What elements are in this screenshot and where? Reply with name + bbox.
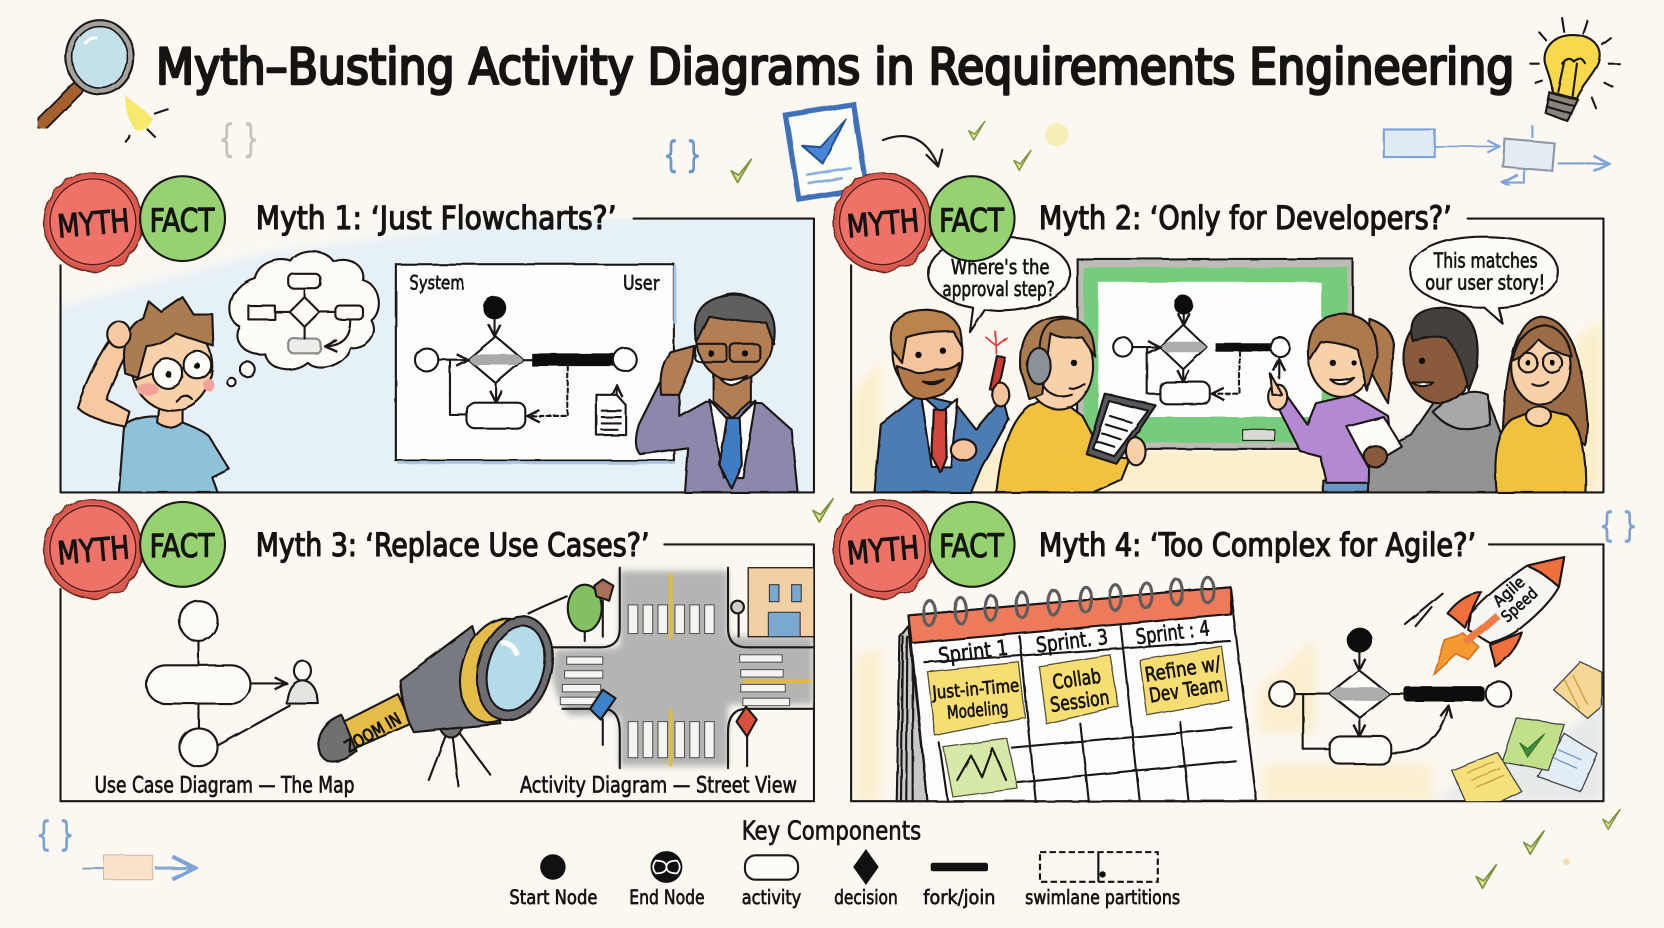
badge pair: panel 3 xyxy=(44,499,225,598)
myth seal 2 xyxy=(833,172,932,271)
heading: myth 3: Myth 3: ‘Replace Use Cases?’ xyxy=(256,526,649,564)
legend: swimlane partitions: swimlane partitions xyxy=(1025,886,1180,909)
icon: blue braces right: { } xyxy=(1599,506,1637,546)
icon: clipboard with check xyxy=(785,104,867,199)
sticky text: collab session: Collab xyxy=(1051,664,1102,694)
myth seal 2: MYTH xyxy=(845,201,921,246)
panel: myth 1 xyxy=(53,212,828,499)
legend: activity: activity xyxy=(742,886,801,909)
sticky text: collab session: Session xyxy=(1049,685,1111,717)
street intersection xyxy=(529,568,814,768)
flow sketch: bottom left xyxy=(82,855,195,880)
sprint calendar xyxy=(897,577,1256,801)
legend: fork join: fork/join xyxy=(923,886,995,909)
use case diagram xyxy=(146,601,318,766)
icon: check between panels xyxy=(813,499,833,522)
badge pair: panel 4 xyxy=(833,499,1015,598)
sticky text: just-in-time modeling: Modeling xyxy=(946,698,1009,724)
panel 1 frame xyxy=(61,219,814,492)
legend: fork join xyxy=(923,863,995,909)
figure: woman with glasses xyxy=(1495,316,1588,492)
icon: scattered checks and yellow dot xyxy=(969,121,1069,170)
legend: end node: End Node xyxy=(629,886,705,909)
title: Myth–Busting Activity Diagrams in Requirements Engineering xyxy=(156,38,1514,96)
legend: swimlane partitions xyxy=(1025,852,1180,909)
label: agile speed: Speed xyxy=(1497,584,1541,626)
fact seal 1 xyxy=(140,176,225,261)
panel 3 frame xyxy=(61,544,814,801)
badge pair: panel 1 xyxy=(44,172,225,271)
icon: blue braces: { } xyxy=(663,135,701,177)
icon: magnifying glass xyxy=(42,20,134,123)
sticky text: refine with dev team: Refine w/ xyxy=(1143,651,1223,687)
green whiteboard xyxy=(1077,259,1353,449)
fact seal 1: FACT xyxy=(150,201,215,239)
legend: key components xyxy=(509,816,1180,909)
telescope with zoom in label xyxy=(318,608,564,786)
figure: person with headset and tablet xyxy=(996,316,1156,492)
panel: myth 3 xyxy=(61,544,814,801)
label: system lane: System xyxy=(410,272,465,295)
panel: myth 2 xyxy=(851,219,1603,492)
label: agile speed: Agile xyxy=(1489,572,1529,611)
rocket with agile speed label xyxy=(1405,557,1564,674)
panel 2 frame xyxy=(851,219,1603,492)
figure: confused boy xyxy=(78,297,229,492)
label: sprint 4: Sprint : 4 xyxy=(1134,616,1211,650)
legend: decision: decision xyxy=(834,886,898,909)
speech bubble: approval step xyxy=(929,237,1070,332)
myth seal 4 xyxy=(833,499,932,598)
legend: activity xyxy=(742,855,801,909)
badge pair: panel 2 xyxy=(833,172,1015,271)
speech bubble: user story xyxy=(1410,237,1558,324)
heading: myth 2: Myth 2: ‘Only for Developers?’ xyxy=(1039,199,1452,237)
figure: person in grey hoodie with notepad xyxy=(1347,308,1506,492)
panel 4 wash xyxy=(854,637,1603,801)
speech text: approval step: approval step? xyxy=(942,277,1055,301)
sticky text: just-in-time modeling: Just-in-Time xyxy=(931,675,1020,704)
speech text: user story: This matches xyxy=(1433,248,1538,272)
myth seal 1: MYTH xyxy=(56,201,131,246)
icon: small yellow spark xyxy=(125,96,168,141)
myth seal 4: MYTH xyxy=(845,528,921,572)
myth seal 3: MYTH xyxy=(56,528,131,572)
whiteboard activity diagram xyxy=(396,264,675,463)
panel 2 warm wash xyxy=(852,318,1602,492)
legend heading: Key Components xyxy=(742,816,921,846)
myth seal 3 xyxy=(44,499,142,598)
fact seal 3: FACT xyxy=(150,527,215,565)
icon: grey braces: { } xyxy=(219,118,259,162)
legend: decision xyxy=(834,849,898,909)
speech text: approval step: Where's the xyxy=(951,255,1050,279)
sticky text: refine with dev team: Dev Team xyxy=(1147,672,1225,708)
heading: myth 4: Myth 4: ‘Too Complex for Agile?’ xyxy=(1039,526,1476,564)
flow sketch: top right xyxy=(1384,125,1609,183)
label: use case diagram: Use Case Diagram — The Map xyxy=(94,773,354,799)
fact seal 2 xyxy=(930,176,1015,261)
fact seal 2: FACT xyxy=(939,201,1004,239)
fact seal 4: FACT xyxy=(939,527,1004,565)
thought cloud xyxy=(227,251,379,386)
figure: bearded man with laser pointer xyxy=(874,310,1009,492)
myth seal 1 xyxy=(44,172,142,271)
legend: start node xyxy=(509,854,597,909)
icon: blue braces bottom left: { } xyxy=(36,815,74,855)
speech text: user story: our user story! xyxy=(1425,271,1545,295)
label: activity diagram: Activity Diagram — Street View xyxy=(520,773,797,799)
figure: man adjusting glasses xyxy=(636,294,798,492)
fact seal 4 xyxy=(930,502,1015,587)
arrow: curved black arrow xyxy=(883,136,942,167)
legend: start node: Start Node xyxy=(509,886,597,909)
label: zoom in: ZOOM IN xyxy=(342,709,405,757)
icon: bottom right checks xyxy=(1476,809,1620,888)
activity diagram xyxy=(1269,627,1511,764)
icon: check mark xyxy=(731,159,751,183)
label: sprint 1: Sprint 1 xyxy=(937,636,1010,669)
icon: lightbulb xyxy=(1530,18,1619,121)
legend: end node xyxy=(629,851,705,909)
label: sprint 3: Sprint. 3 xyxy=(1035,625,1109,659)
panel: myth 4 xyxy=(851,544,1603,802)
figure: woman with ponytail pointing xyxy=(1268,314,1394,492)
label: user lane: User xyxy=(623,272,660,295)
panel 1 pale blue wash xyxy=(53,212,828,499)
scattered sticky notes xyxy=(1452,662,1601,802)
panel 4 frame xyxy=(851,544,1603,801)
fact seal 3 xyxy=(140,502,225,587)
heading: myth 1: Myth 1: ‘Just Flowcharts?’ xyxy=(256,199,617,237)
